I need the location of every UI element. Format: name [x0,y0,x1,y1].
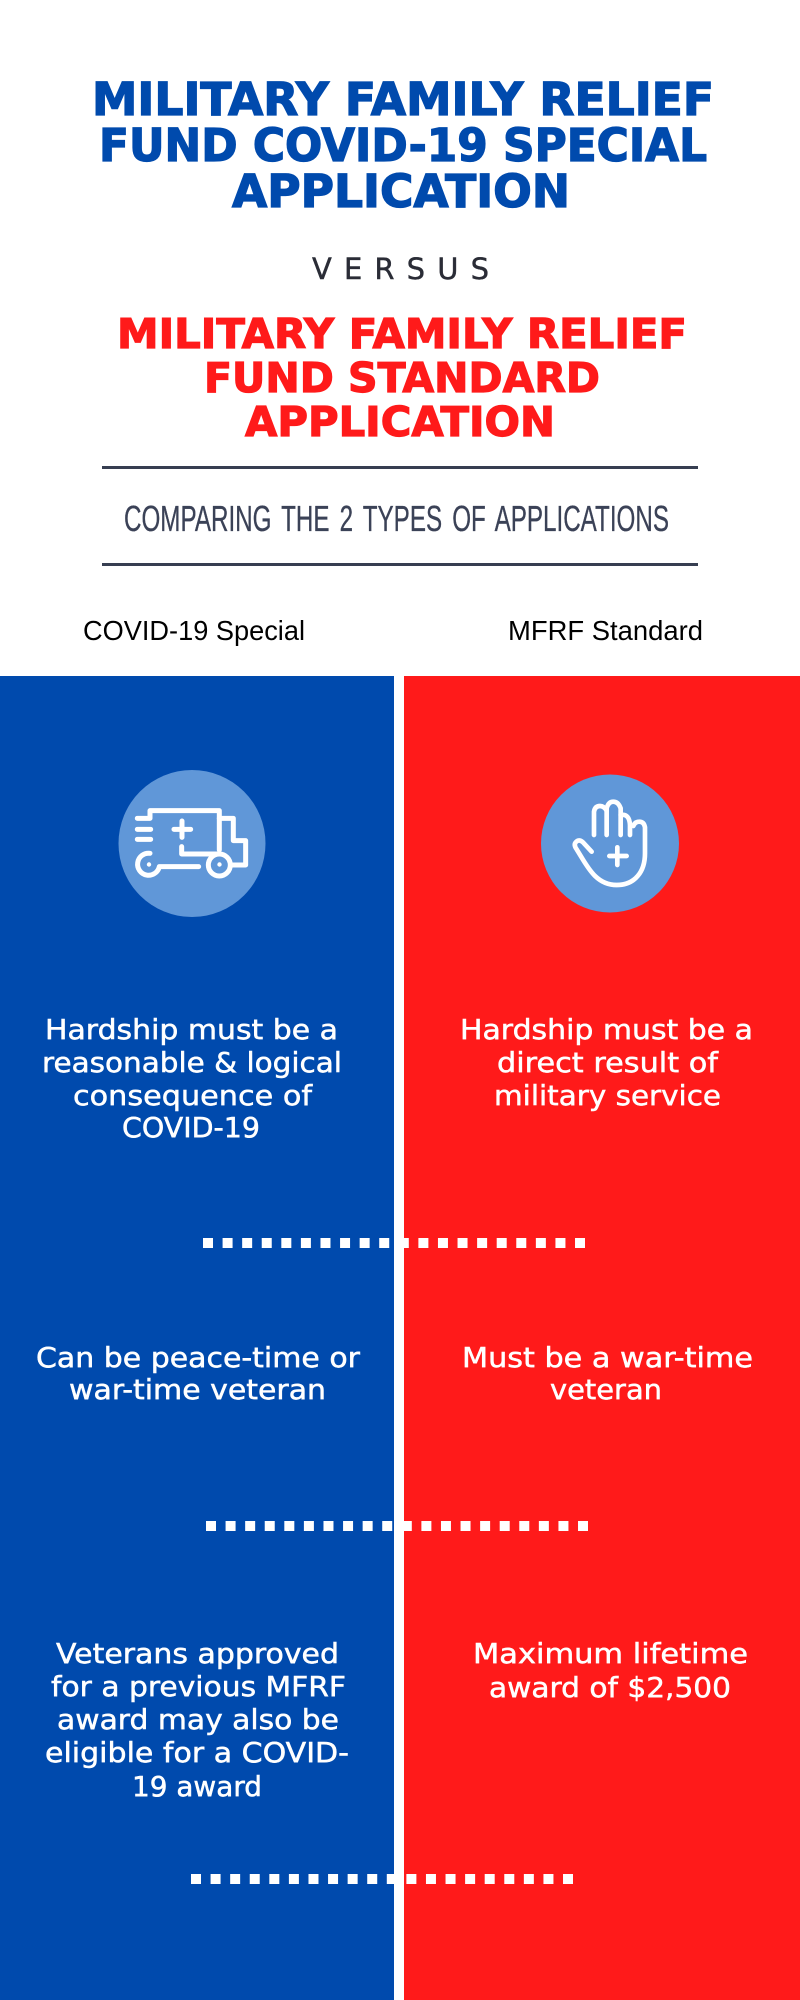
text: previous award covid: eligible for a COVID- [45,1737,349,1769]
text: veteran status covid: Can be peace-time or [36,1342,361,1374]
icon: hand with plus [541,774,679,912]
text: maximum award standard: Maximum lifetime [473,1638,748,1670]
text: maximum award standard: award of $2,500 [489,1672,731,1704]
text: hardship covid: COVID-19 [122,1112,260,1144]
text: veteran status standard: Must be a war-time [462,1342,753,1374]
heading: COVID-19 special application title [92,73,714,218]
text: hardship standard: direct result of [497,1047,719,1079]
heading: COVID-19 special application title: FUND COVID-19 SPECIAL [99,119,707,172]
column label: MFRF Standard: MFRF Standard [508,615,703,646]
text: veteran status standard [462,1342,753,1406]
text: maximum award standard [473,1638,748,1704]
heading: COVID-19 special application title: APPLICATION [232,165,570,218]
text: previous award covid: Veterans approved [56,1638,339,1670]
text: previous award covid [45,1638,349,1803]
heading: standard application title [117,310,687,446]
text: veteran status standard: veteran [550,1374,662,1406]
text: previous award covid: for a previous MFRF [51,1671,346,1703]
text: hardship covid: consequence of [73,1080,313,1112]
heading: COVID-19 special application title: MILITARY FAMILY RELIEF [92,73,714,126]
icon: ambulance [118,770,266,917]
text: veteran status covid [36,1342,361,1406]
text: hardship covid: reasonable & logical [42,1047,342,1079]
text: previous award covid: 19 award [132,1771,262,1803]
heading: standard application title: FUND STANDARD [204,354,600,402]
panel: COVID-19 special column [0,676,394,2000]
text: versus: VERSUS [312,252,489,286]
text: hardship standard [460,1014,753,1112]
panel: MFRF standard column [404,676,800,2000]
text: hardship covid [42,1014,342,1144]
text: hardship standard: Hardship must be a [460,1014,753,1046]
text: hardship standard: military service [494,1080,721,1112]
column label: COVID-19 Special: COVID-19 Special [83,615,305,646]
text: previous award covid: award may also be [57,1704,339,1736]
text: veteran status covid: war-time veteran [69,1374,326,1406]
text: hardship covid: Hardship must be a [45,1014,338,1046]
heading: standard application title: MILITARY FAMILY RELIEF [117,310,687,358]
heading: standard application title: APPLICATION [245,398,555,446]
